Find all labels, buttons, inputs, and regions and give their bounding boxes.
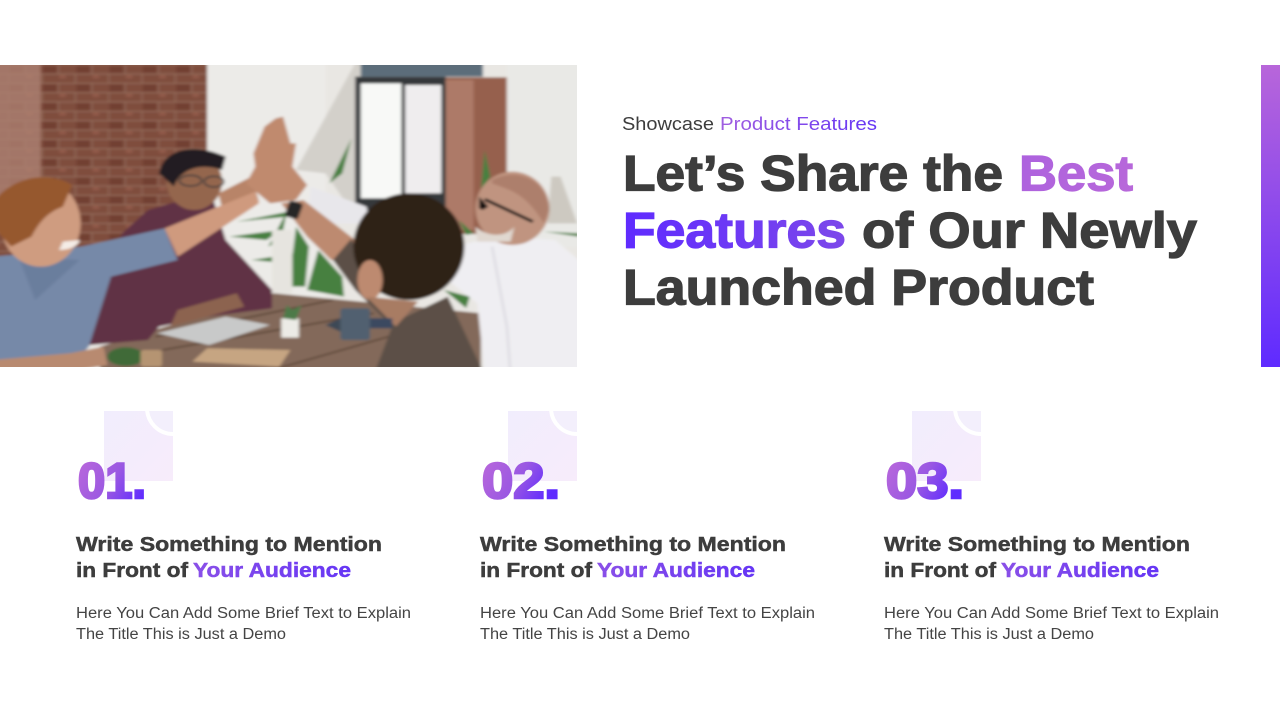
main title <box>623 144 1197 316</box>
heading 03: Write Something to Mention <box>884 533 1190 556</box>
laptop, plant, mug and notebook <box>157 317 270 345</box>
window <box>355 77 446 217</box>
body text 02: Here You Can Add Some Brief Text to Explain <box>480 605 815 622</box>
heading 02: Your Audience <box>597 559 755 582</box>
photo: team high five at a table <box>0 60 586 377</box>
man in maroon shirt <box>89 192 272 345</box>
heading 03 <box>884 533 1190 582</box>
body text 03: The Title This is Just a Demo <box>884 626 1094 643</box>
heading 02: Write Something to Mention <box>480 533 786 556</box>
decorative square 03 <box>912 411 981 481</box>
number 02: 02. <box>482 453 560 509</box>
heading 01: Write Something to Mention <box>76 533 382 556</box>
heading 02: in Front of <box>480 559 592 582</box>
man in white shirt <box>328 198 370 222</box>
decorative square 02 <box>508 411 577 481</box>
feature column 03 <box>884 411 1218 639</box>
body text 03: Here You Can Add Some Brief Text to Explain <box>884 605 1219 622</box>
person with curly hair, back to camera <box>281 200 355 260</box>
left brick wall <box>0 60 207 273</box>
main title: Launched Product <box>623 258 1094 316</box>
main title: Let’s Share the <box>623 144 1003 202</box>
feature column 01 <box>76 411 410 639</box>
main title: Features <box>623 202 846 258</box>
table <box>100 293 481 373</box>
main title: of Our Newly <box>862 202 1197 258</box>
kicker: Showcase Product Features: Product Features <box>720 114 877 134</box>
number 03: 03. <box>886 453 964 509</box>
heading 01: Your Audience <box>193 559 351 582</box>
man in blue shirt <box>0 228 178 362</box>
body text 03 <box>884 605 1219 643</box>
body text 01 <box>76 605 411 643</box>
number 01: 01. <box>78 453 146 509</box>
heading 03: in Front of <box>884 559 996 582</box>
feature column 02 <box>480 411 814 639</box>
heading 03: Your Audience <box>1001 559 1159 582</box>
main title: Best <box>1019 144 1133 202</box>
kicker: Showcase Product Features: Showcase <box>622 114 714 134</box>
body text 02: The Title This is Just a Demo <box>480 626 690 643</box>
body text 01: Here You Can Add Some Brief Text to Explain <box>76 605 411 622</box>
right brick wall <box>446 77 507 234</box>
heading 02 <box>480 533 786 582</box>
wall <box>88 65 577 367</box>
heading 01: in Front of <box>76 559 188 582</box>
body text 02 <box>480 605 815 643</box>
heading 01 <box>76 533 382 582</box>
raised hands <box>246 117 307 203</box>
body text 01: The Title This is Just a Demo <box>76 626 286 643</box>
gradient side bar <box>1261 65 1280 367</box>
kicker: Showcase Product Features <box>622 114 877 134</box>
decorative square 01 <box>104 411 173 481</box>
plants <box>229 138 579 308</box>
